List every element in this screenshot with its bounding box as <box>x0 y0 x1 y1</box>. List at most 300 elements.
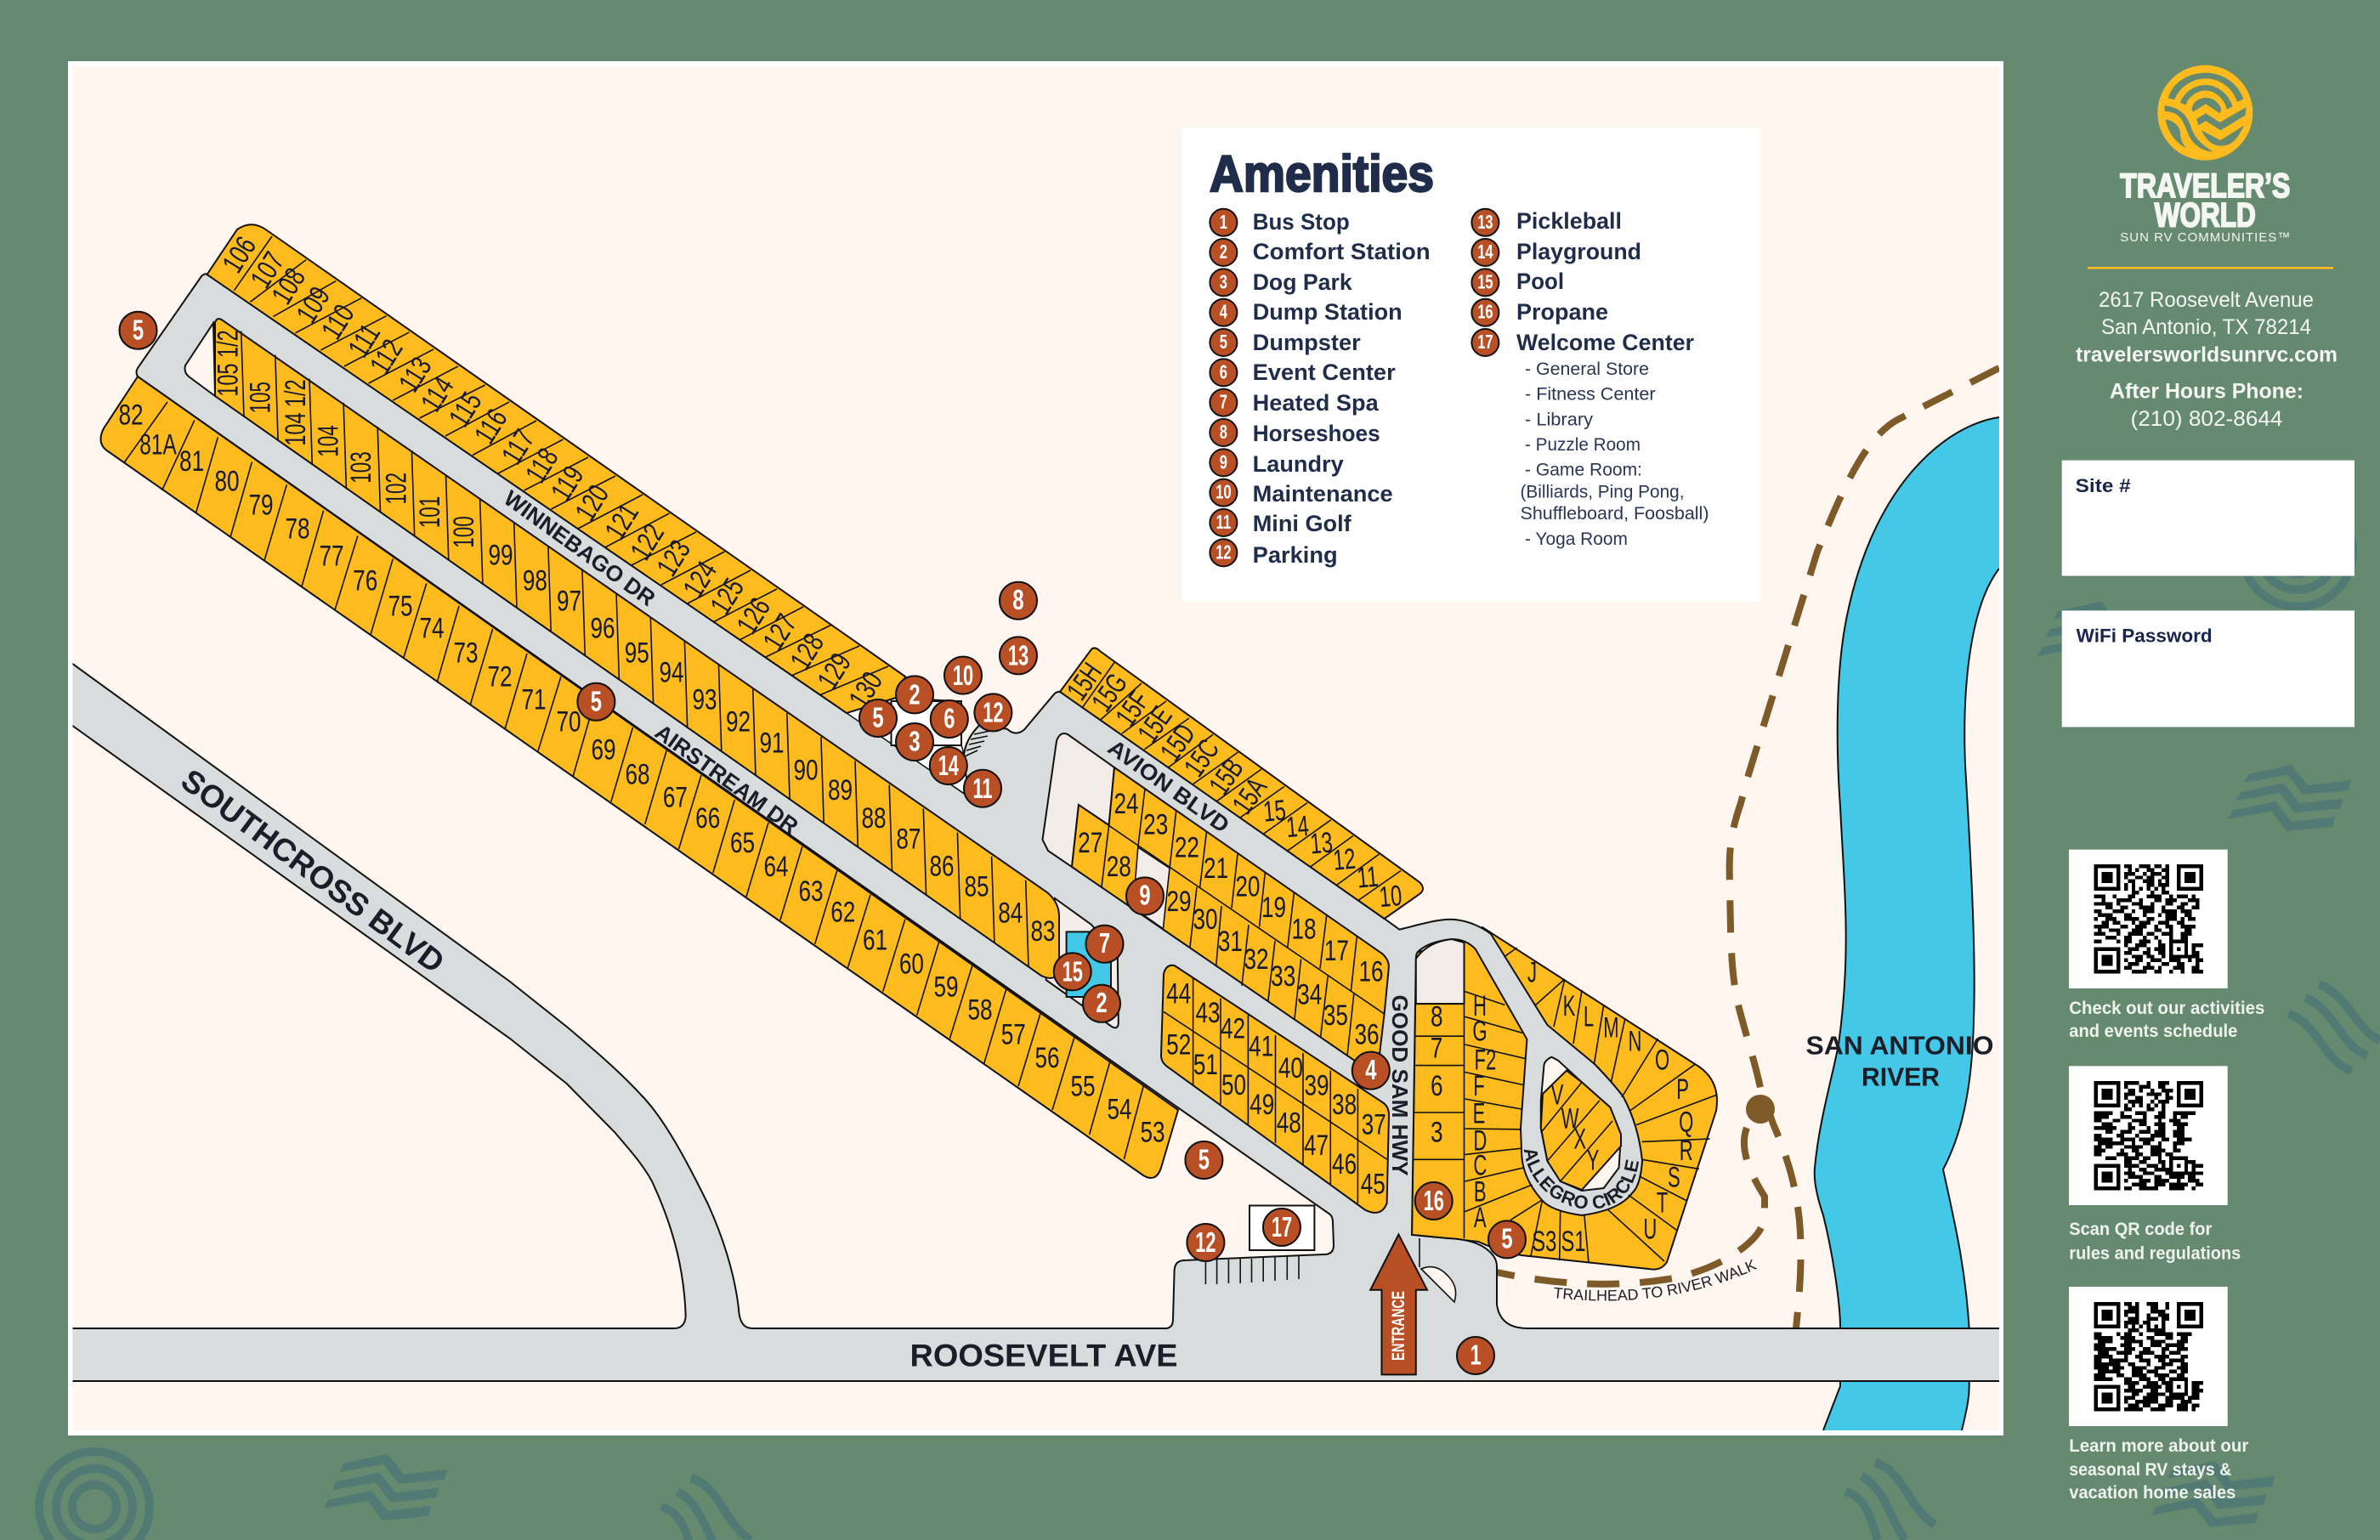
lot numbers: 63 <box>798 876 824 908</box>
lot numbers: 121 <box>599 498 645 546</box>
lot letters: F <box>1473 1071 1485 1102</box>
lot numbers: 102 <box>381 473 413 505</box>
lot numbers: 54 <box>1107 1095 1132 1125</box>
lot numbers: 111 <box>343 319 387 363</box>
decorative zigzag: behind wifi box <box>2037 602 2161 668</box>
lot numbers: 82 <box>118 400 144 431</box>
map marker 2 pool <box>1083 985 1120 1022</box>
lot dividers <box>1465 948 1716 1263</box>
lot numbers: 22 <box>1175 833 1199 863</box>
lot numbers: 13 <box>1309 826 1334 861</box>
lot numbers: 107 <box>245 246 291 294</box>
map marker 14 <box>930 747 967 784</box>
lot numbers: 17 <box>1324 936 1349 967</box>
lot letters: H <box>1473 990 1487 1022</box>
trail: trailhead branch <box>1497 1128 1765 1284</box>
legend names column 2 <box>1516 208 1694 355</box>
map marker 5 airstream: 5 <box>591 687 602 717</box>
lot numbers: 15C <box>1178 733 1226 783</box>
contact details <box>2076 288 2338 431</box>
lot numbers: 15G <box>1085 668 1134 717</box>
parking hatch: welcome center <box>1205 1255 1299 1284</box>
lot numbers: 90 <box>793 756 819 786</box>
map marker 9 <box>1126 877 1164 914</box>
bottom row sites 82-53 <box>100 377 1178 1178</box>
wifi password box: WiFi Password <box>2077 626 2213 646</box>
lot letters: E <box>1473 1098 1485 1130</box>
map marker 3: 3 <box>909 727 921 757</box>
map marker 2: 2 <box>909 680 921 711</box>
welcome center sub-list: - Game Room: <box>1525 461 1642 479</box>
map marker 5: 5 <box>872 703 884 733</box>
lot numbers: 100 <box>449 516 480 548</box>
site number box: Site # <box>2076 475 2131 496</box>
legend badges column 2: 16 <box>1477 302 1493 323</box>
lot numbers: 20 <box>1235 871 1260 903</box>
lot numbers <box>118 400 1165 1148</box>
map marker 5 <box>859 699 897 737</box>
legend names column 1: Heated Spa <box>1253 390 1380 416</box>
lot numbers: 14 <box>1285 810 1310 844</box>
welcome center sub-list: - General Store <box>1525 360 1649 379</box>
lot numbers: 87 <box>896 824 921 855</box>
lot numbers: 28 <box>1107 852 1131 883</box>
map marker 5 airstream <box>577 683 615 721</box>
lot numbers: 30 <box>1193 904 1218 936</box>
lot numbers: 124 <box>677 556 723 603</box>
map marker 6: 6 <box>944 704 955 734</box>
caption: activities: Check out our activities <box>2069 999 2264 1018</box>
legend badges column 2: 17 <box>1477 331 1493 354</box>
decorative wave: right side <box>2289 984 2380 1071</box>
lot numbers: 39 <box>1304 1071 1329 1101</box>
lot numbers: 10 <box>1378 880 1403 914</box>
lot dividers <box>1413 943 1464 1238</box>
lot numbers: 128 <box>785 628 830 676</box>
lot numbers <box>1061 657 1403 914</box>
lot numbers: 36 <box>1354 1019 1380 1050</box>
allegro teardrop centre <box>1541 1057 1621 1191</box>
lot outline <box>100 377 1178 1178</box>
lot numbers: 29 <box>1166 886 1192 918</box>
lot numbers: 16 <box>1358 957 1384 988</box>
lot dividers <box>1164 978 1387 1203</box>
map marker 1: 1 <box>1470 1340 1482 1371</box>
map marker 7: 7 <box>1099 928 1110 960</box>
qr code: sales <box>2069 1287 2228 1426</box>
lot numbers: 48 <box>1277 1108 1301 1139</box>
caption: sales: vacation home sales <box>2069 1483 2236 1503</box>
map marker 5 allegro: 5 <box>1501 1224 1513 1255</box>
lot numbers: 44 <box>1166 978 1191 1010</box>
map marker 5 lower: 5 <box>1198 1145 1210 1175</box>
lot numbers: 81A <box>139 429 177 461</box>
lot numbers: 91 <box>759 728 785 759</box>
lot numbers: 6 <box>1431 1071 1443 1102</box>
caption: rules: Scan QR code for <box>2069 1220 2212 1239</box>
lot numbers: 40 <box>1278 1053 1303 1084</box>
road label: roosevelt: ROOSEVELT AVE <box>910 1338 1178 1373</box>
legend names column 2: Welcome Center <box>1516 330 1694 355</box>
lot numbers: 12 <box>1332 842 1357 877</box>
legend names column 2: Playground <box>1516 239 1641 264</box>
decorative zigzag: bottom left <box>324 1454 447 1520</box>
lot numbers: 85 <box>964 871 989 903</box>
legend badges column 2: 14 <box>1477 241 1493 263</box>
map marker 2 pool: 2 <box>1096 988 1108 1019</box>
lot numbers: 37 <box>1362 1110 1386 1141</box>
caption: rules: rules and regulations <box>2069 1244 2241 1263</box>
lot numbers: 76 <box>353 566 377 597</box>
lot numbers: 110 <box>315 299 361 345</box>
lot numbers: 41 <box>1249 1032 1273 1062</box>
map marker 16 <box>1415 1182 1453 1220</box>
legend names column 1: Comfort Station <box>1253 239 1431 264</box>
legend badges column 1: 8 <box>1220 422 1227 444</box>
lot letters: Q <box>1679 1107 1693 1139</box>
trail label guide <box>1553 1268 1759 1300</box>
lot numbers: 15A <box>1227 772 1273 820</box>
decorative zigzag: right side <box>2228 765 2351 831</box>
legend names column 2: Propane <box>1516 299 1608 325</box>
map marker 8 <box>1000 582 1037 620</box>
legend badges column 1: 5 <box>1220 331 1227 354</box>
lot letters: M <box>1603 1012 1619 1045</box>
laundry gap <box>1133 847 1170 929</box>
avion top row sites 15H-10 <box>1060 648 1423 919</box>
legend names column 2: Pool <box>1516 269 1564 294</box>
lot numbers <box>1431 1002 1443 1148</box>
allegro teardrop lots <box>1541 1071 1621 1190</box>
lot numbers: 86 <box>929 852 955 882</box>
lot numbers: 79 <box>248 490 274 521</box>
map marker 14: 14 <box>938 750 959 781</box>
lot numbers: 117 <box>496 424 541 470</box>
map marker 6 <box>931 700 968 738</box>
lot numbers: 53 <box>1140 1118 1165 1148</box>
lot letters: O <box>1655 1045 1669 1077</box>
welcome center sub-list: Shuffleboard, Foosball) <box>1520 504 1708 524</box>
lot numbers: 3 <box>1431 1117 1443 1148</box>
map marker 15: 15 <box>1062 956 1083 988</box>
welcome center sub-list: - Fitness Center <box>1525 384 1656 405</box>
map marker 2 <box>896 676 933 713</box>
lot letters: S1 <box>1561 1226 1586 1258</box>
lot letters: S3 <box>1532 1226 1556 1258</box>
legend heading: Amenities <box>1210 145 1434 202</box>
decorative wave: bottom left <box>661 1478 751 1540</box>
legend badges column 1: 12 <box>1216 542 1232 563</box>
lot numbers <box>212 330 1056 948</box>
road label: good sam: GOOD SAM HWY <box>1387 994 1413 1176</box>
lot numbers: 97 <box>557 586 581 617</box>
map marker 11 <box>964 770 1001 807</box>
lot numbers: 32 <box>1244 944 1269 976</box>
lot numbers: 66 <box>695 803 720 835</box>
lot numbers: 42 <box>1221 1014 1245 1045</box>
legend badges column 1: 4 <box>1220 302 1228 323</box>
lot numbers: 45 <box>1361 1169 1386 1200</box>
lot numbers: 94 <box>659 658 684 688</box>
teardrop letters: W <box>1561 1103 1578 1135</box>
wifi password box <box>2062 610 2354 727</box>
lot letters: K <box>1563 990 1575 1022</box>
map marker 13: 13 <box>1008 640 1028 671</box>
legend badges column 1: 11 <box>1216 512 1231 534</box>
lot numbers: 15F <box>1109 685 1156 733</box>
lot numbers: 93 <box>692 685 717 716</box>
map marker 4 <box>1352 1052 1390 1090</box>
legend names column 1: Dog Park <box>1253 269 1353 295</box>
legend names column 1: Laundry <box>1253 451 1344 477</box>
lot numbers: 118 <box>519 443 565 489</box>
legend names column 2: Pickleball <box>1516 208 1622 234</box>
map marker 8: 8 <box>1012 585 1024 616</box>
qr code: activities <box>2069 850 2228 988</box>
decorative zigzag: bottom right <box>2151 1461 2275 1527</box>
logo wordmark <box>2120 167 2290 245</box>
lot numbers: 74 <box>419 614 445 644</box>
legend badges column 1 <box>1210 209 1237 566</box>
panel: amenities legend <box>1182 127 1760 602</box>
map <box>73 224 1999 1430</box>
lot outline <box>1161 965 1389 1213</box>
lot numbers: 99 <box>488 541 513 571</box>
parking hatch: upper <box>965 731 990 756</box>
map card <box>68 61 2003 1435</box>
lot numbers: 23 <box>1143 810 1168 841</box>
map marker 11: 11 <box>972 773 993 804</box>
lot numbers: 58 <box>967 995 993 1026</box>
legend badges column 1: 9 <box>1220 452 1227 473</box>
lot numbers: 105 1/2 <box>212 330 245 397</box>
lot numbers: 115 <box>443 387 489 433</box>
teardrop letters: Y <box>1587 1145 1599 1177</box>
lot letters: U <box>1643 1214 1657 1246</box>
lot numbers: 116 <box>468 404 514 450</box>
map marker 9: 9 <box>1139 880 1151 912</box>
logo wordmark: SUN RV COMMUNITIES™ <box>2120 230 2290 245</box>
lot numbers: 46 <box>1332 1149 1357 1180</box>
teardrop letters <box>1551 1079 1599 1177</box>
lot numbers: 31 <box>1218 926 1243 958</box>
caption: sales: seasonal RV stays & <box>2069 1460 2231 1480</box>
lot numbers: 34 <box>1297 980 1322 1011</box>
map marker 17: 17 <box>1272 1212 1292 1243</box>
lot dividers <box>124 402 1143 1159</box>
lot numbers <box>1078 789 1384 1050</box>
map marker 7 <box>1086 926 1124 963</box>
river <box>1815 417 1999 1430</box>
lot numbers: 119 <box>545 461 591 507</box>
caption: activities <box>2069 999 2264 1041</box>
lot numbers: 73 <box>453 638 479 669</box>
map marker 5 left <box>119 312 156 349</box>
trail: river walk main <box>1730 368 1999 1328</box>
lot letters: D <box>1473 1125 1487 1158</box>
lot numbers: 49 <box>1250 1090 1274 1121</box>
lot numbers: 126 <box>731 592 777 640</box>
welcome center sub-list: - Puzzle Room <box>1525 435 1640 455</box>
welcome center sub-list: - Yoga Room <box>1525 529 1628 549</box>
legend badges column 1: 3 <box>1220 272 1227 293</box>
lot numbers: 103 <box>345 451 377 484</box>
legend names column 1: Event Center <box>1253 360 1396 385</box>
lot numbers: 106 <box>217 231 263 279</box>
caption: rules <box>2069 1220 2241 1263</box>
lot numbers: 35 <box>1323 1000 1348 1032</box>
road label: airstream: AIRSTREAM DR <box>650 719 803 839</box>
caption: activities: and events schedule <box>2069 1022 2237 1041</box>
lot letters: B <box>1474 1176 1487 1209</box>
decorative ripple: bottom left <box>39 1452 150 1540</box>
map marker 15 <box>1054 953 1091 990</box>
site number box <box>2062 461 2354 576</box>
lot outline <box>1060 648 1423 919</box>
lot numbers: 125 <box>705 573 751 620</box>
lot numbers: 21 <box>1204 853 1228 885</box>
lot dividers <box>1083 663 1401 900</box>
dog park and event center area <box>847 698 968 796</box>
lot letters: J <box>1527 957 1537 989</box>
sidebar logo <box>2120 65 2290 245</box>
lot numbers: 89 <box>828 775 853 807</box>
lot numbers: 71 <box>521 685 547 716</box>
good sam island <box>1416 939 1464 1004</box>
lot dividers <box>1079 789 1385 1056</box>
teardrop letters: X <box>1573 1124 1586 1156</box>
legend badges column 1: 2 <box>1220 241 1227 263</box>
logo wordmark: TRAVELER’S <box>2120 167 2290 205</box>
welcome center sub-list: (Billiards, Ping Pong, <box>1520 483 1685 501</box>
lot numbers: 114 <box>415 371 461 417</box>
lot numbers: 64 <box>763 852 789 883</box>
map marker 13 <box>1000 637 1037 674</box>
lot numbers <box>217 231 889 714</box>
lot numbers: 15B <box>1203 753 1250 801</box>
lot numbers: 52 <box>1166 1030 1191 1061</box>
lot numbers: 7 <box>1431 1033 1442 1064</box>
lot numbers: 15H <box>1061 657 1108 706</box>
lot letters: L <box>1584 1001 1594 1033</box>
legend names column 1: Maintenance <box>1253 481 1393 507</box>
map marker 10: 10 <box>953 660 973 691</box>
road network <box>71 274 2001 1381</box>
logo wordmark: WORLD <box>2155 197 2256 235</box>
lot outline <box>1072 767 1389 1076</box>
legend names column 1: Dumpster <box>1253 330 1361 355</box>
lot numbers: 72 <box>487 662 513 693</box>
lot numbers: 105 <box>245 382 277 413</box>
lot numbers: 56 <box>1034 1043 1060 1074</box>
welcome center building <box>1250 1205 1314 1250</box>
lot numbers: 27 <box>1078 828 1102 859</box>
lot numbers: 78 <box>285 514 310 545</box>
lot dividers <box>234 236 888 695</box>
lot letters: T <box>1657 1187 1668 1220</box>
lot numbers: 65 <box>730 828 755 859</box>
lot numbers: 127 <box>757 609 803 656</box>
lot letters: G <box>1472 1016 1488 1048</box>
top row sites 106-130 <box>207 224 905 714</box>
map marker 3 <box>896 723 933 761</box>
lot numbers: 83 <box>1030 916 1056 948</box>
lot numbers: 33 <box>1271 961 1295 993</box>
decorative wave: bottom right <box>1845 1463 1935 1540</box>
trail junction node <box>1746 1095 1775 1124</box>
lot numbers: 101 <box>414 496 446 528</box>
allegro text guide <box>1524 1149 1640 1209</box>
lot numbers: 11 <box>1356 860 1380 895</box>
welcome center sub-list <box>1520 360 1708 549</box>
legend names column 1: Horseshoes <box>1253 421 1380 446</box>
teardrop letters: V <box>1551 1079 1563 1112</box>
map marker 4: 4 <box>1365 1055 1376 1086</box>
map marker 12: 12 <box>983 697 1004 728</box>
legend names column 1: Dump Station <box>1253 299 1402 325</box>
lot numbers: 43 <box>1195 998 1221 1029</box>
lot numbers: 123 <box>651 535 697 582</box>
logo mark <box>2157 65 2252 161</box>
lot numbers: 67 <box>663 782 688 813</box>
lot letters <box>1472 957 1693 1258</box>
lot letters: S <box>1668 1162 1680 1194</box>
lot numbers: 104 1/2 <box>280 379 312 446</box>
lot numbers: 55 <box>1070 1072 1096 1102</box>
map marker 12 <box>974 694 1012 731</box>
lot letters: N <box>1629 1026 1641 1058</box>
teardrop dividers <box>1541 1082 1612 1181</box>
lot numbers: 120 <box>570 479 615 527</box>
lot numbers: 88 <box>861 803 887 835</box>
contact details: 2617 Roosevelt Avenue <box>2099 288 2314 312</box>
legend badges column 2: 13 <box>1477 212 1493 234</box>
legend names column 1: Mini Golf <box>1253 511 1352 536</box>
lot numbers: 15E <box>1131 700 1179 749</box>
lot outline <box>207 224 905 713</box>
allegro sites <box>1465 948 1716 1263</box>
map marker 16: 16 <box>1424 1186 1444 1216</box>
winnebago island <box>185 323 215 396</box>
lot numbers: 98 <box>523 566 547 597</box>
pool island <box>1046 898 1119 1028</box>
map marker 17 <box>1263 1209 1300 1246</box>
legend badges column 2 <box>1471 209 1499 356</box>
legend names column 1: Parking <box>1253 542 1338 568</box>
contact details: After Hours Phone: <box>2110 380 2304 404</box>
legend badges column 1: 1 <box>1220 212 1227 234</box>
lot numbers: 8 <box>1431 1002 1443 1033</box>
welcome center sub-list: - Library <box>1525 410 1594 430</box>
lot numbers: 62 <box>830 897 855 928</box>
lot numbers: 50 <box>1221 1070 1246 1101</box>
lot dividers <box>241 331 1028 966</box>
lot numbers: 59 <box>933 972 959 1003</box>
lot numbers: 51 <box>1193 1050 1218 1081</box>
map marker 5 left: 5 <box>133 315 144 346</box>
lot numbers: 60 <box>899 949 924 980</box>
legend names column 1 <box>1253 209 1431 568</box>
lot numbers: 38 <box>1332 1090 1357 1121</box>
lot numbers: 108 <box>266 263 312 310</box>
river label <box>1805 1030 1994 1091</box>
road label: allegro circle: ALLEGRO CIRCLE <box>1523 1149 1639 1209</box>
lot numbers: 57 <box>1001 1020 1026 1050</box>
legend badges column 1: 6 <box>1220 362 1227 383</box>
map marker 5 lower <box>1185 1141 1222 1179</box>
legend names column 1: Bus Stop <box>1253 209 1350 235</box>
lot numbers: 81 <box>179 446 204 478</box>
